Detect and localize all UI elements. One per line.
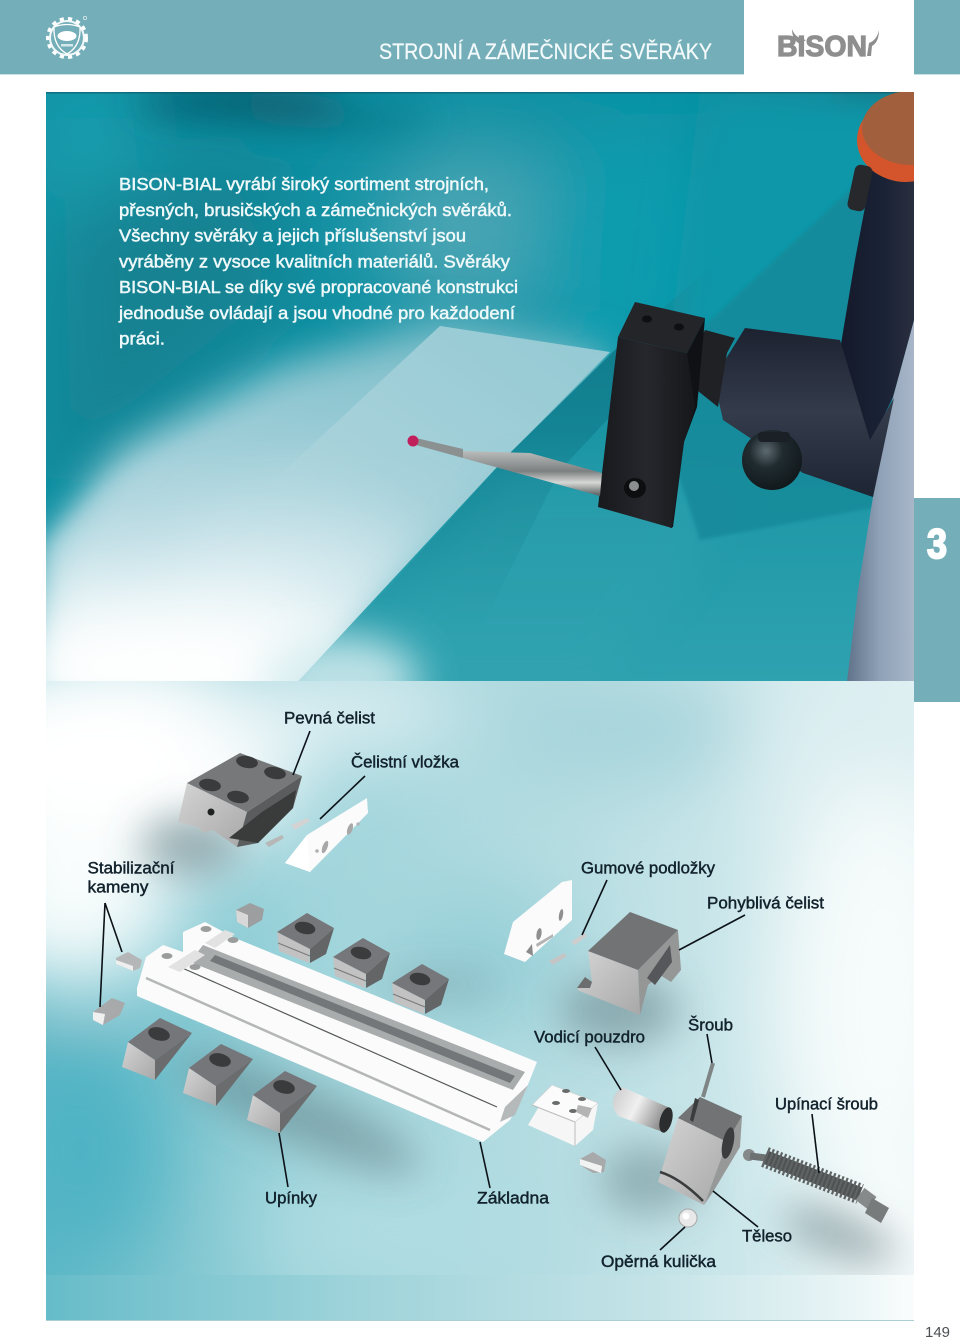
black bracket xyxy=(598,302,705,528)
chapter tab with number 3 xyxy=(914,498,960,702)
header band xyxy=(0,0,960,75)
soft part shadows xyxy=(140,815,904,1276)
part: thrust ball xyxy=(679,1209,697,1227)
body text block: BISON-BIAL vyrábí široký sortiment strojních, xyxy=(119,174,489,194)
body text block: jednoduše ovládají a jsou vhodné pro každodení xyxy=(118,303,515,323)
part: guide bushing xyxy=(613,1087,675,1134)
icon: gear shield logo xyxy=(48,16,87,56)
part labels: Základna xyxy=(477,1190,550,1208)
arm xyxy=(714,328,894,497)
white haze xyxy=(46,506,420,681)
part labels: kameny xyxy=(88,878,149,896)
part: jaw insert with pieces xyxy=(265,798,368,872)
panel: photo background with probe xyxy=(46,92,914,681)
black knob xyxy=(742,430,802,490)
part labels: Čelistní vložka xyxy=(351,752,460,772)
part: upper clamps xyxy=(277,913,449,1014)
probe stylus xyxy=(408,436,602,496)
part: fixed jaw xyxy=(178,753,302,847)
dark column xyxy=(840,170,914,445)
part labels: Gumové podložky xyxy=(581,860,716,878)
part: vise body xyxy=(658,1097,742,1205)
light diagonal panel xyxy=(46,320,610,700)
part labels: Upínací šroub xyxy=(775,1096,878,1114)
part labels: Pohyblivá čelist xyxy=(707,894,824,912)
part labels: Šroub xyxy=(688,1016,733,1034)
body text block: práci. xyxy=(119,328,165,348)
part labels xyxy=(88,710,878,1271)
part: stabilizing stones xyxy=(93,903,264,1025)
part labels: Pevná čelist xyxy=(284,710,375,728)
title: STROJNÍ A ZÁMEČNICKÉ SVĚRÁKY xyxy=(379,39,712,64)
icon: BISON brand logo: BISON xyxy=(777,31,867,63)
small top knob xyxy=(848,164,872,212)
white logo box xyxy=(744,0,914,75)
part: thin screw xyxy=(703,1063,713,1097)
chapter tab with number 3: 3 xyxy=(927,520,947,567)
body text block: Všechny svěráky a jejich příslušenství jsou xyxy=(119,226,466,246)
body text block xyxy=(118,174,518,348)
leader lines xyxy=(100,731,819,1250)
icon: orange disc xyxy=(857,92,914,182)
metal base plate xyxy=(846,320,914,690)
lower strip xyxy=(46,1275,914,1321)
part: small stone xyxy=(580,1152,606,1173)
part labels: Těleso xyxy=(742,1228,792,1246)
part labels: Opěrná kulička xyxy=(601,1253,717,1271)
panel: exploded vise diagram background xyxy=(46,681,914,1321)
dark top sweep xyxy=(135,90,914,130)
part: lower clamps xyxy=(122,1018,317,1133)
part: slider block xyxy=(528,1085,598,1146)
neck xyxy=(698,330,735,407)
part labels: Vodicí pouzdro xyxy=(534,1028,645,1046)
teal floor xyxy=(298,297,871,681)
body text block: přesných, brusičských a zámečnických svěráků. xyxy=(119,200,512,220)
body text block: vyráběny z vysoce kvalitních materiálů. Svěráky xyxy=(119,252,510,272)
part: rail base xyxy=(137,922,537,1142)
part: movable jaw xyxy=(577,912,681,1015)
part labels: Stabilizační xyxy=(88,860,175,878)
part: movable jaw insert with pieces xyxy=(504,880,587,965)
part labels: Upínky xyxy=(265,1190,318,1208)
part: clamping screw xyxy=(743,1149,889,1223)
body text block: BISON-BIAL se díky své propracované konstrukci xyxy=(119,277,518,297)
